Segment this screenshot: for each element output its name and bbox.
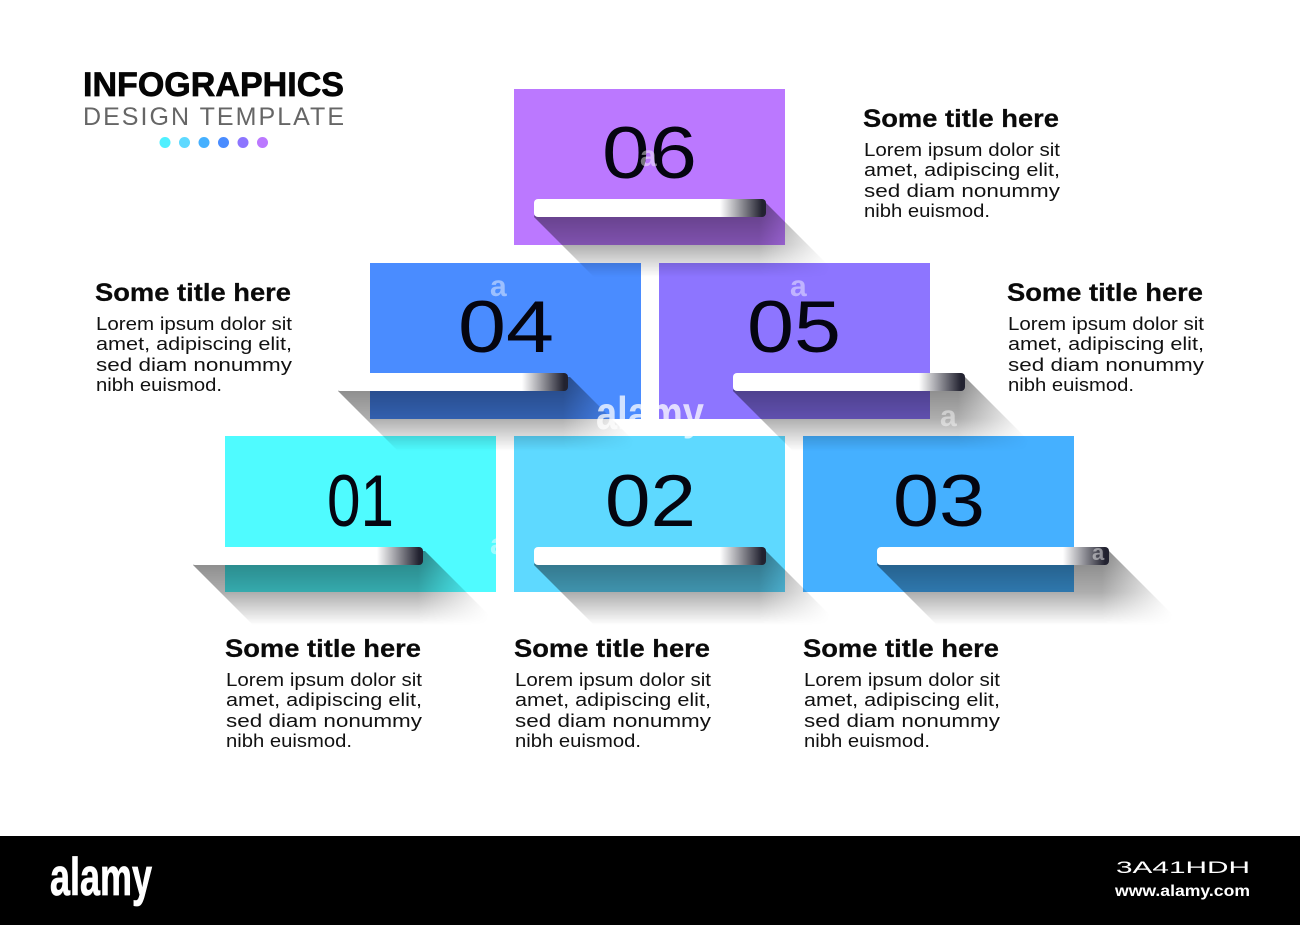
- text block: step 06: [863, 105, 1061, 221]
- text block: step 03: [803, 635, 1001, 751]
- text block: step 05: Lorem ipsum dolor sit: [1008, 313, 1204, 334]
- watermark: a: [490, 528, 507, 561]
- text block: step 01: sed diam nonummy: [226, 710, 423, 731]
- panel: step 06: 06: [602, 113, 697, 194]
- text block: step 06: Lorem ipsum dolor sit: [864, 139, 1060, 160]
- panel: step 01: 01: [327, 461, 394, 542]
- panel: step 03: 03: [893, 461, 985, 542]
- text block: step 06: Some title here: [863, 105, 1059, 133]
- watermark: a: [940, 400, 957, 433]
- text block: step 03: amet, adipiscing elit,: [804, 689, 1000, 710]
- watermark: alamy: [596, 387, 704, 439]
- text block: step 04: amet, adipiscing elit,: [96, 333, 292, 354]
- panel: step 02: 02: [605, 461, 696, 542]
- panel: step 05: [659, 263, 1029, 451]
- image id: 3A41HDH: [1116, 858, 1250, 877]
- text block: step 04: nibh euismod.: [96, 374, 222, 395]
- panel: step 06: [514, 89, 830, 277]
- text block: step 02: Lorem ipsum dolor sit: [515, 669, 711, 690]
- text block: step 02: amet, adipiscing elit,: [515, 689, 711, 710]
- text block: step 05: Some title here: [1007, 279, 1203, 307]
- watermark: a: [640, 140, 657, 173]
- text block: step 01: nibh euismod.: [226, 730, 352, 751]
- text block: step 02: nibh euismod.: [515, 730, 641, 751]
- panel: step 04: 04: [458, 287, 554, 368]
- text block: step 01: Lorem ipsum dolor sit: [226, 669, 422, 690]
- text block: step 01: Some title here: [225, 635, 421, 663]
- watermark: [490, 140, 1105, 565]
- text block: step 04: [95, 279, 293, 395]
- text block: step 06: amet, adipiscing elit,: [864, 159, 1060, 180]
- text block: step 05: [1007, 279, 1205, 395]
- text block: step 03: Lorem ipsum dolor sit: [804, 669, 1000, 690]
- title: INFOGRAPHICS: [83, 66, 344, 104]
- text block: step 03: nibh euismod.: [804, 730, 930, 751]
- text block: step 04: Some title here: [95, 279, 291, 307]
- subtitle: DESIGN TEMPLATE: [83, 103, 344, 131]
- panel: step 05: 05: [747, 287, 841, 368]
- text block: step 05: amet, adipiscing elit,: [1008, 333, 1204, 354]
- footer bar: [0, 836, 1300, 925]
- text block: step 05: nibh euismod.: [1008, 374, 1134, 395]
- text block: step 02: sed diam nonummy: [515, 710, 712, 731]
- watermark: a: [790, 270, 807, 303]
- text block: step 04: sed diam nonummy: [96, 354, 293, 375]
- text block: step 03: sed diam nonummy: [804, 710, 1001, 731]
- panel: step 04: [336, 263, 641, 451]
- colour dots: [160, 137, 268, 148]
- watermark: a: [1092, 540, 1105, 565]
- text block: step 01: [225, 635, 423, 751]
- text block: step 03: Some title here: [803, 635, 999, 663]
- website: www.alamy.com: [1114, 883, 1250, 900]
- text block: step 01: amet, adipiscing elit,: [226, 689, 422, 710]
- panel: step 02: [514, 436, 830, 625]
- text block: step 06: nibh euismod.: [864, 200, 990, 221]
- text block: step 05: sed diam nonummy: [1008, 354, 1205, 375]
- heading: infographics design template: [83, 66, 344, 148]
- watermark: a: [490, 270, 507, 303]
- text block: step 02: Some title here: [514, 635, 710, 663]
- panel: step 01: [191, 436, 496, 625]
- text block: step 02: [514, 635, 712, 751]
- text block: step 06: sed diam nonummy: [864, 180, 1061, 201]
- footer logo: alamy: [50, 848, 152, 907]
- panel: step 03: [803, 436, 1173, 625]
- text block: step 04: Lorem ipsum dolor sit: [96, 313, 292, 334]
